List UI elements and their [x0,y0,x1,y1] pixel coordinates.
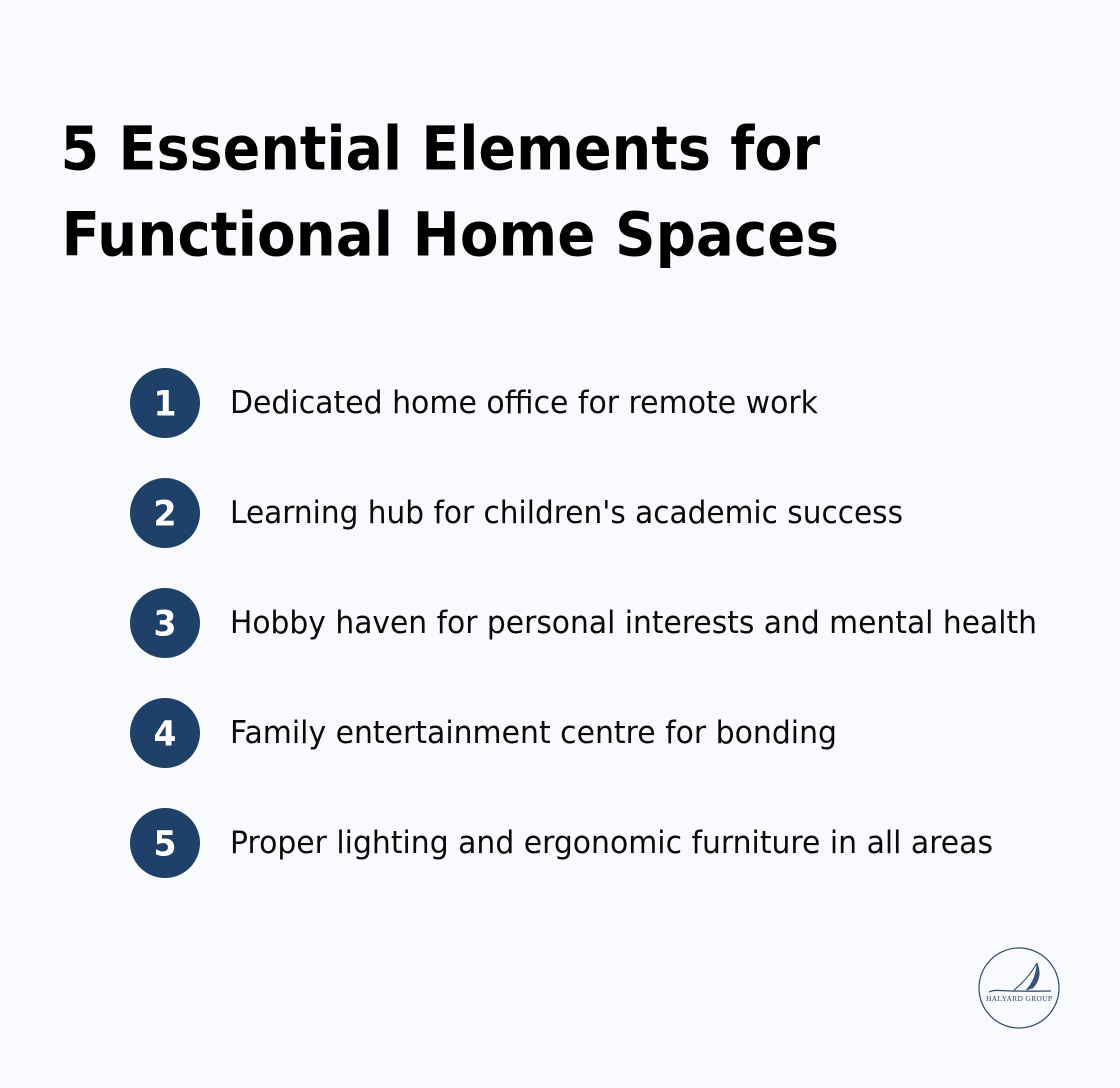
list item 2 [130,478,903,548]
list item 5: 5 [154,824,176,864]
list item 1 [130,368,819,438]
list item 4 [130,698,837,768]
list item 2: Learning hub for children's academic success [230,495,903,531]
list item 3: 3 [154,604,176,644]
list item 4: 4 [154,714,176,754]
list item 3 [130,588,1037,658]
list item 1: 1 [154,384,176,424]
list item 3: Hobby haven for personal interests and mental health [230,605,1037,641]
title: Functional Home Spaces [62,200,839,270]
list item 4: Family entertainment centre for bonding [230,715,837,751]
logo: Halyard Group: HALYARD GROUP [986,994,1052,1003]
logo: Halyard Group [979,948,1059,1028]
list item 1: Dedicated home office for remote work [230,385,819,421]
list item 5: Proper lighting and ergonomic furniture in all areas [230,825,993,861]
title [60,114,839,270]
title: 5 Essential Elements for [60,114,820,184]
list item 2: 2 [154,494,176,534]
list item 5 [130,808,993,878]
